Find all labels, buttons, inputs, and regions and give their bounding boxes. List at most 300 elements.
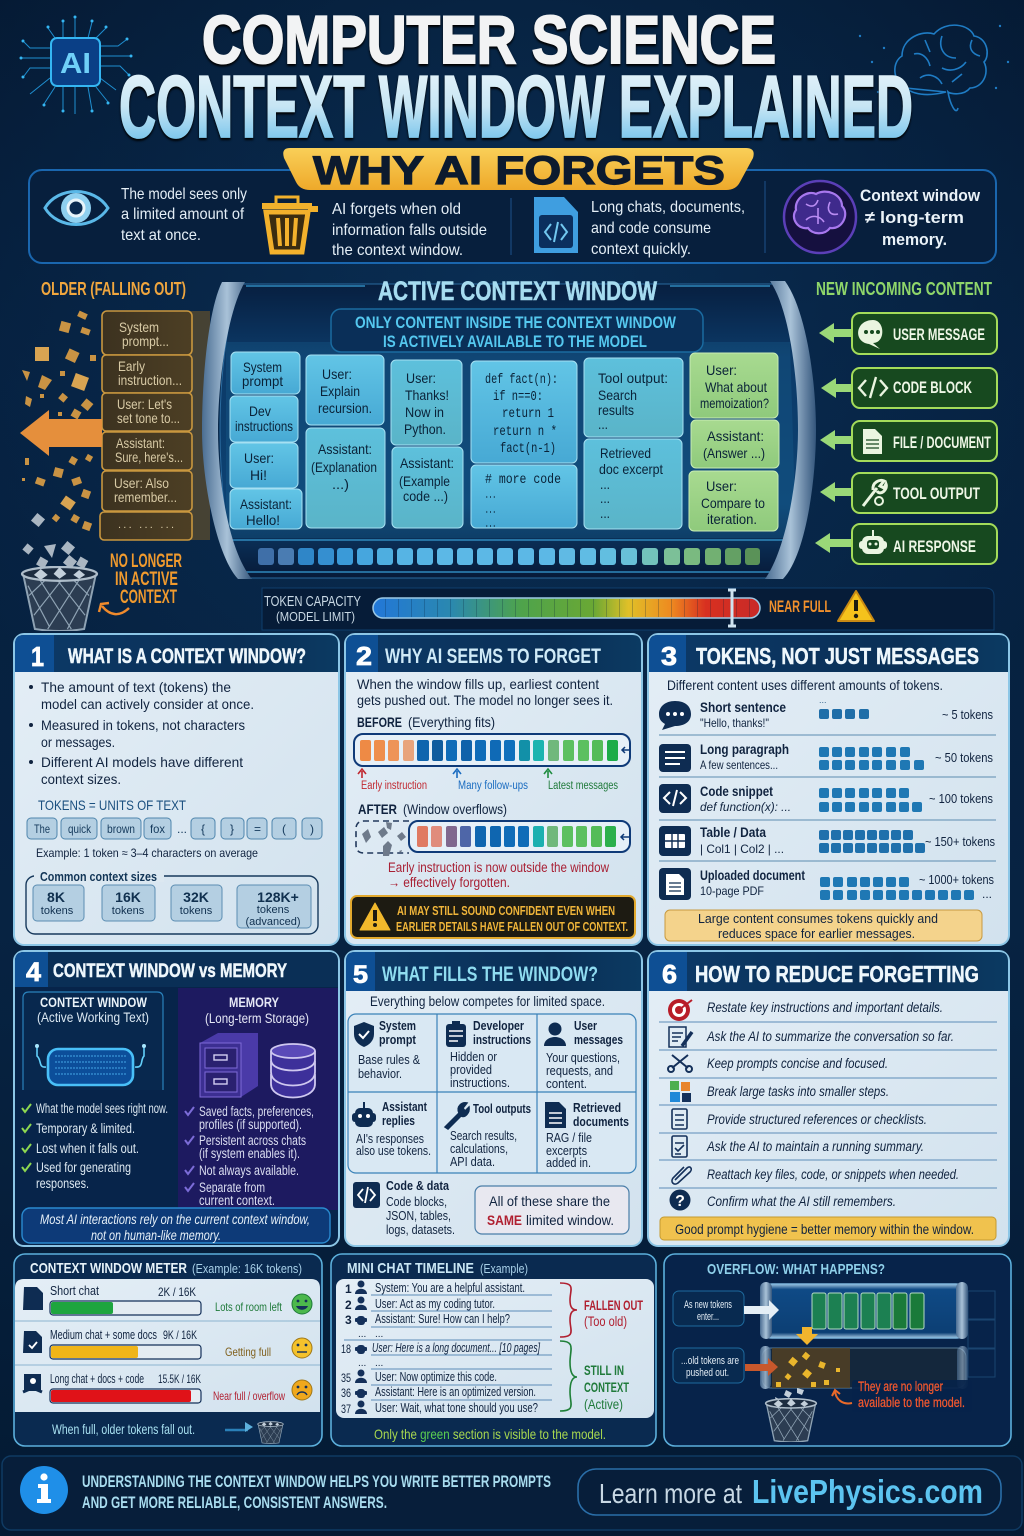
older messages stack [100,311,210,540]
meter row: short chat [23,1283,312,1315]
column 3 cards: (Example [399,473,450,489]
debris falling into bin [22,513,88,569]
token chips: ... [177,822,187,836]
icon: purple brain [784,181,856,253]
column 3 cards: Now in [405,404,444,420]
icon: code document [534,197,578,253]
cell: user messages: Your questions, [546,1051,620,1065]
label: old tokens: ...old tokens are [681,1355,739,1367]
column 2 cards: User: [322,366,352,382]
arrow: tokens pushed out [745,1358,778,1376]
panel 4: context window vs memory [14,951,339,1246]
bracket: still in context [560,1341,630,1412]
icon: AI chip [20,16,132,114]
column 5 cards: Retrieved [600,445,651,461]
header 1: WHAT IS A CONTEXT WINDOW? [68,645,306,668]
footer message: UNDERSTANDING THE CONTEXT WINDOW HELPS YOU WRITE BETTER PROMPTS [82,1472,551,1491]
cell: retrieved documents: Retrieved [573,1100,621,1115]
availability note: ONLY CONTENT INSIDE THE CONTEXT WINDOW [355,313,677,332]
column 1 cards: Assistant: [240,496,292,512]
common context sizes: tokens [41,905,74,917]
memory column heading: MEMORY [229,994,280,1010]
row: uploaded document: Uploaded document [700,867,805,883]
cell: retrieved documents: added in. [546,1156,591,1170]
arrows: incoming [815,323,851,553]
learn more link [578,1469,1001,1515]
text: no longer in active context: NO LONGER [110,551,182,572]
learn more link: LivePhysics.com [752,1473,983,1510]
timeline rows: 3 [345,1313,352,1327]
cell: user messages: User [574,1018,597,1033]
learn more link: Learn more at [599,1478,742,1509]
cell: user messages: content. [546,1077,587,1091]
context window column heading: (Active Working Text) [37,1010,149,1025]
text: limited view: a limited amount of [121,206,244,223]
text: not memory: ≠ long-term [865,208,964,227]
capacity bar [373,590,760,626]
row: code snippet: Code snippet [700,783,773,799]
cell: retrieved documents: excerpts [546,1144,587,1158]
timeline rows: User: Now optimize this code. [375,1369,497,1384]
bracket: still in context: (Active) [584,1397,623,1412]
before label [357,714,495,730]
button: tool output [852,473,997,513]
text: no longer in active context [110,551,182,608]
cell: assistant replies: also use tokens. [356,1144,431,1158]
column 5 cards: Search [598,387,637,403]
before labels: Latest messages [548,780,618,792]
icon: question mark [670,1190,690,1210]
cell: system prompt [354,1018,421,1081]
older messages stack: System [119,319,159,335]
header 6: 6 [662,959,677,989]
availability note [331,309,703,352]
header 5: 5 [353,961,368,989]
cell: user messages: requests, and [546,1064,613,1078]
column 5 cards [584,358,683,529]
row: short sentence [659,695,993,730]
token chips: { [201,822,205,836]
column 5 cards: doc excerpt [599,461,663,477]
column 3 cards: Assistant: [400,455,454,471]
footer bar [2,1456,1022,1530]
warning callout [351,896,635,938]
token chips: ( [282,822,286,836]
token chips: quick [68,822,92,836]
timeline rows: ... [358,1329,366,1340]
icon: question mark: ? [675,1193,685,1210]
bullet list: The amount of text (tokens) the [41,679,231,695]
icon: AI chip: AI [60,48,91,80]
row: code snippet: ~ 100 tokens [929,791,993,806]
bullet list: model can actively consider at once. [41,696,254,712]
timeline rows: 35 [341,1371,351,1385]
capacity label: (MODEL LIMIT) [276,609,355,624]
header 6 [649,952,1008,991]
tips list [706,1000,959,1209]
column 4 code cards: if n==0: [493,389,543,405]
button: ai response [852,524,997,564]
before labels: Many follow-ups [458,780,528,792]
common context sizes: (advanced) [245,916,301,928]
timeline rows: ... [375,1329,383,1340]
intro text: When the window fills up, earliest content [357,676,599,692]
column 2 cards: Assistant: [318,441,372,457]
column 4 code cards: ... [485,516,496,532]
column 4 code cards [471,361,577,532]
cell: assistant replies: replies [382,1113,415,1128]
cell: tool outputs: Tool outputs [473,1101,531,1116]
token chips: = [254,822,261,836]
button: code block: CODE BLOCK [893,378,972,397]
text: forgets: AI forgets when old [332,201,461,218]
context window column heading: CONTEXT WINDOW [40,994,148,1010]
memory column background [178,988,338,1210]
icon: eye [45,192,108,224]
token chips [27,818,322,839]
token capacity gauge [262,588,994,630]
cell: developer instructions: instructions. [450,1076,510,1090]
cell: user messages: messages [574,1032,623,1047]
forgotten note: Early instruction is now outside the window [388,860,609,875]
meter row: medium chat: Medium chat + some docs [50,1328,157,1342]
panel 1: what is a context window [14,634,339,945]
tips list: Reattach key files, code, or snippets when needed. [707,1167,959,1182]
shared window callout: limited window. [526,1212,614,1228]
row: uploaded document: ~ 1000+ tokens [919,872,994,887]
cell: assistant replies [352,1099,431,1158]
red note: available to the model. [858,1395,965,1410]
row: code snippet [659,783,993,814]
column 6 new green cards: User: [706,478,737,494]
column 3 cards: Thanks! [405,387,449,403]
code and data [353,1178,455,1237]
icon: trash can [262,197,318,252]
text: no longer in active context: CONTEXT [120,587,177,608]
header 4 [15,952,338,987]
column 5 cards: ... [598,416,608,432]
row: long paragraph: ~ 50 tokens [935,750,993,765]
token example: Example: 1 token ≈ 3–4 characters on average [36,846,258,860]
meter heading: (Example: 16K tokens) [192,1261,302,1276]
column 1 cards: prompt [242,373,283,389]
context window checklist [22,1101,168,1191]
text: not memory: memory. [882,230,947,249]
column 3 cards: Python. [404,421,446,437]
meter row: medium chat [23,1328,312,1359]
older messages stack: Assistant: [116,435,165,451]
after bar with overflow [356,821,630,856]
shared window callout [475,1186,629,1234]
timeline rows: 36 [341,1386,351,1400]
label: old tokens: pushed out. [686,1367,729,1379]
text: long chats: and code consume [591,220,711,237]
column 2 cards: recursion. [318,400,372,416]
cell: developer instructions: instructions [473,1032,531,1047]
arrow: tokens enter [744,1300,779,1320]
timeline rows: User: Here is a long document... [10 pages] [372,1340,540,1355]
cell: retrieved documents: documents [573,1114,629,1129]
text: not memory [860,186,981,249]
column 6 new green cards: Assistant: [707,428,764,444]
icon: database [271,1044,315,1098]
column 1 cards: Hi! [250,467,267,483]
tips list: Confirm what the AI still remembers. [707,1194,896,1209]
context window checklist: Temporary & limited. [36,1121,135,1136]
memory checklist: Separate from [199,1180,265,1195]
column 1 cards: Dev [249,403,271,419]
text: long chats: context quickly. [591,241,691,258]
memory note: not on human-like memory. [91,1228,221,1243]
debris particles [22,311,96,531]
icon: overflow basket [766,1388,816,1442]
code and data: JSON, tables, [386,1209,451,1223]
before label: (Everything fits) [408,714,495,730]
column 3 cards: User: [406,370,436,386]
column 5 cards: ... [600,505,610,521]
cell: user messages [544,1018,623,1091]
icon: warning triangle [838,591,874,621]
row: table data [659,824,995,856]
bullet list: or messages. [41,734,115,750]
tips list: Provide structured references or checklists. [707,1112,927,1127]
token chips: brown [107,822,135,836]
context window meter panel [14,1254,322,1446]
text: forgets [332,201,487,259]
column 6 new green cards: (Answer ...) [703,445,765,461]
tokens heading: TOKENS = UNITS OF TEXT [38,797,186,813]
token chips: } [230,822,234,836]
cylinder left ring [202,282,252,579]
older messages stack: instruction... [118,372,182,388]
older messages stack: Sure, here's... [115,449,183,465]
column 2 cards [306,355,385,528]
panel 2: why ai seems to forget [345,634,642,945]
memory checklist [185,1104,314,1208]
after label: AFTER [358,801,397,817]
content grid [348,1014,636,1173]
new tokens tank [760,1282,968,1339]
meter footer [52,1421,283,1444]
label: new tokens [673,1291,744,1326]
large content note: Large content consumes tokens quickly and [698,911,938,926]
panel 5: what fills the window [345,951,642,1246]
before bar [354,734,630,766]
row: uploaded document: 10-page PDF [700,884,764,898]
code and data: logs, datasets. [386,1223,455,1237]
common context sizes: 32K [183,889,209,905]
bullet list: Different AI models have different [41,754,243,770]
text: forgets: the context window. [332,242,463,259]
arrow: curved note [832,1390,852,1403]
title: COMPUTER SCIENCE [202,2,776,78]
icon: info [20,1466,68,1514]
cell: tool outputs: calculations, [450,1142,508,1156]
row: table data: ~ 150+ tokens [925,834,995,849]
older falling out heading: OLDER (FALLING OUT) [41,279,186,299]
meter row: short chat: 2K / 16K [158,1285,196,1299]
cell: tool outputs: API data. [450,1155,495,1169]
subtitle banner: WHY AI FORGETS [313,149,725,193]
meter footer: When full, older tokens fall out. [52,1421,195,1437]
row: short sentence: Short sentence [700,699,786,715]
icon: filing cabinet [200,1033,258,1097]
token chips: fox [150,822,165,836]
column 4 code cards: ... [485,487,496,503]
row: long paragraph [659,741,993,772]
arrow: curved to basket [99,603,129,614]
bracket: fallen out: (Too old) [584,1314,627,1329]
timeline role icons [355,1280,367,1414]
shared window callout: SAME [487,1212,522,1228]
intro text [357,676,613,708]
text: not memory: Context window [860,186,981,205]
cell: retrieved documents: RAG / file [546,1131,592,1145]
common context sizes [26,869,318,934]
token chips: The [34,822,50,836]
token strip [258,548,760,565]
header 4: 4 [26,957,41,987]
cell: assistant replies: Assistant [382,1099,428,1114]
capacity label [264,593,361,624]
cell: developer instructions: provided [450,1063,492,1077]
older messages stack: prompt... [122,333,169,349]
after label: (Window overflows) [403,801,507,817]
meter row: long chat: Near full / overflow [213,1389,285,1403]
cell: developer instructions: Developer [473,1018,524,1033]
meter row: short chat: Short chat [50,1283,99,1298]
button: tool output: TOOL OUTPUT [893,484,980,503]
bracket: fallen out: FALLEN OUT [584,1298,644,1313]
meter row: medium chat: Getting full [225,1345,271,1359]
older messages stack: Early [118,358,145,374]
meter row: long chat: 15.5K / 16K [158,1372,201,1386]
memory checklist: Not always available. [199,1163,299,1178]
button: user message [852,313,997,354]
column 6 new green cards [689,353,779,531]
tips list: Keep prompts concise and focused. [707,1056,888,1071]
timeline rows: 2 [345,1298,352,1312]
column 4 code cards: fact(n-1) [500,441,556,457]
cell: developer instructions [446,1018,531,1090]
memory note: Most AI interactions rely on the current context window, [40,1212,310,1227]
intro text: gets pushed out. The model no longer sees it. [357,692,613,708]
warning callout: EARLIER DETAILS HAVE FALLEN OUT OF CONTEXT. [396,919,628,934]
column 1 cards [230,352,302,529]
header 5 [346,952,641,991]
cell: system prompt: Base rules & [358,1053,421,1067]
text: limited view: text at once. [121,227,201,244]
timeline rows: User: Act as my coding tutor. [375,1296,495,1311]
bullet list [29,679,254,787]
header 4: CONTEXT WINDOW vs MEMORY [53,960,287,982]
capacity label: TOKEN CAPACITY [264,593,361,610]
icon: scissors [668,1055,692,1072]
column 6 new green cards: iteration. [707,511,757,527]
row: long paragraph: Long paragraph [700,741,789,757]
icon: target [668,999,692,1021]
timeline footer: Only the green section is visible to the model. [374,1426,606,1442]
before label: BEFORE [357,714,402,730]
timeline rows: 37 [341,1402,351,1416]
panel 6: how to reduce forgetting [648,951,1009,1246]
header 1 [15,635,338,672]
row: uploaded document: ... [982,887,992,901]
cell: system prompt: behavior. [358,1067,402,1081]
column 4 code cards: ... [485,502,496,518]
timeline rows: User: Wait, what tone should you use? [375,1400,538,1415]
code and data: Code blocks, [386,1195,447,1209]
memory checklist: Persistent across chats [199,1133,306,1148]
button: code block [852,368,997,408]
icon: running summary clipboard [672,1136,687,1157]
cell: tool outputs [445,1101,531,1169]
before labels: Early instruction [361,780,427,792]
context window column heading [23,992,163,1090]
column 1 cards: Hello! [246,512,280,528]
mini chat timeline panel [331,1254,656,1446]
before labels [358,769,618,792]
header 2 [346,635,641,672]
meter row: long chat: Long chat + docs + code [50,1372,144,1386]
column 2 cards: Explain [320,383,360,399]
icon: glowing window [35,1044,146,1085]
memory checklist: Saved facts, preferences, [199,1104,314,1119]
code and data: Code & data [386,1178,450,1193]
intro 5: Everything below competes for limited space. [370,993,605,1009]
forgotten note: → effectively forgotten. [388,875,510,890]
icon: waste basket [22,567,97,631]
label: new tokens: enter... [697,1311,719,1323]
panel 3: tokens not just messages [648,634,1009,945]
row: table data: | Col1 | Col2 | ... [700,842,784,856]
timeline rows: System: You are a helpful assistant. [375,1280,525,1295]
column 1 cards: System [243,359,282,375]
meter row: long chat [23,1372,312,1403]
timeline heading: MINI CHAT TIMELINE [347,1260,474,1277]
column 2 cards: ...) [332,476,349,492]
row: code snippet: def function(x): ... [700,800,791,814]
near full label: NEAR FULL [769,597,831,616]
column 1 cards: User: [244,450,274,466]
prompt hygiene note [660,1217,996,1240]
older messages stack: remember... [114,489,177,505]
active context window cylinder [202,276,816,579]
column 4 code cards: # more code [485,472,561,488]
context window checklist: What the model sees right now. [36,1101,168,1116]
row: table data: Table / Data [700,824,766,840]
label: new tokens: As new tokens [684,1299,732,1311]
header 1: 1 [31,641,44,672]
row: long paragraph: A few sentences... [700,758,778,772]
timeline rows: 18 [341,1342,351,1356]
forgotten note [388,860,609,890]
older messages stack: set tone to... [117,410,180,426]
cell: system prompt: prompt [379,1032,417,1047]
timeline rows [341,1280,540,1416]
memory checklist: current context. [199,1193,275,1208]
arrow: down [796,1327,818,1345]
context window checklist: responses. [36,1176,89,1191]
large content note [665,910,982,941]
text: limited view [121,186,247,244]
cell: developer instructions: Hidden or [450,1050,497,1064]
column 4 code cards: def fact(n): [485,372,558,388]
column 5 cards: Tool output: [598,370,668,386]
footer message: AND GET MORE RELIABLE, CONSISTENT ANSWERS. [82,1493,387,1512]
window heading: ACTIVE CONTEXT WINDOW [378,276,657,306]
icon: puzzle pieces [670,1081,691,1102]
